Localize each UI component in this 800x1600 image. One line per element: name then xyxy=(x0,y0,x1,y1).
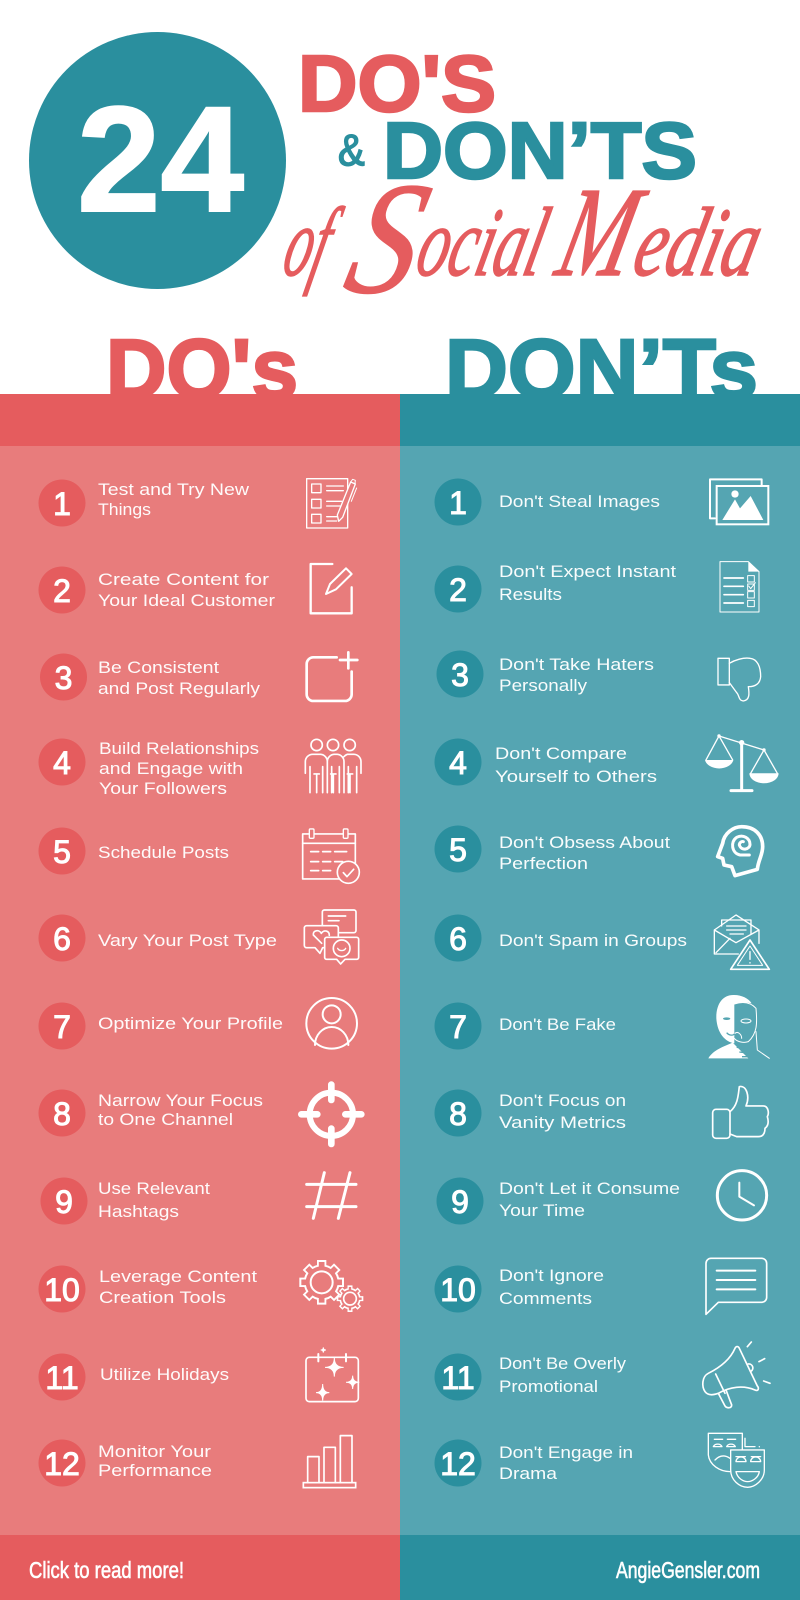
item 5: schedule posts: Schedule Posts xyxy=(98,843,229,862)
item 8: vanity metrics: Vanity Metrics xyxy=(499,1113,626,1132)
item 2: create content xyxy=(53,570,275,610)
icon: head spiral xyxy=(718,827,763,876)
item 9: consume time xyxy=(451,1179,680,1220)
item 10: comments: Don't Ignore xyxy=(499,1266,604,1285)
item 9: hashtags: 9 xyxy=(55,1184,73,1220)
item 1: test and try xyxy=(53,480,250,522)
badge: 24 circle: 24 xyxy=(77,75,244,243)
item 4: compare: Don't Compare xyxy=(495,744,627,763)
item 3: be consistent: 3 xyxy=(55,660,72,696)
icon: speech bubble xyxy=(706,1258,767,1314)
item 6: spam: Don't Spam in Groups xyxy=(499,931,687,950)
item 10: content tools: 10 xyxy=(44,1272,80,1308)
item 12: drama: Don't Engage in xyxy=(499,1443,633,1462)
footer: red link bar: Click to read more! xyxy=(29,1557,184,1583)
band: teal header xyxy=(400,394,800,446)
item 3: be consistent xyxy=(55,658,261,698)
item 1: test and try: Things xyxy=(98,500,151,519)
item 4: build relationships: Your Followers xyxy=(99,779,227,798)
icon: target crosshair xyxy=(301,1085,361,1144)
item 1: test and try: 1 xyxy=(53,486,71,522)
item 2: instant results: Results xyxy=(499,585,562,604)
item 5: perfection: Don't Obsess About xyxy=(499,833,670,852)
item 6: spam: 6 xyxy=(449,921,467,957)
item 9: consume time: Your Time xyxy=(499,1201,585,1220)
item 5: schedule posts: 5 xyxy=(53,834,71,870)
icon: calendar check xyxy=(303,829,359,883)
icon: three people xyxy=(305,739,361,793)
item 4: compare xyxy=(449,744,657,786)
title: of Social Media script: ocial xyxy=(408,187,575,297)
item 3: be consistent: Be Consistent xyxy=(98,658,219,677)
icon: document checklist xyxy=(720,562,759,612)
item 8: narrow focus: Narrow Your Focus xyxy=(98,1091,263,1110)
icon: drama masks xyxy=(708,1433,764,1487)
panel: don'ts list xyxy=(400,446,800,1535)
item 12: drama: Drama xyxy=(499,1464,558,1483)
item 12: monitor performance: 12 xyxy=(44,1446,80,1482)
item 12: drama xyxy=(440,1443,633,1483)
title: ampersand: & xyxy=(337,124,366,176)
item 6: spam xyxy=(449,921,687,957)
item 10: content tools: Creation Tools xyxy=(99,1288,226,1307)
item 11: promotional: Promotional xyxy=(499,1377,598,1396)
item 1: steal images: Don't Steal Images xyxy=(499,492,660,511)
icon: holiday calendar xyxy=(306,1347,359,1402)
item 9: hashtags: Use Relevant xyxy=(98,1179,210,1198)
icon: chat bubbles xyxy=(304,910,359,964)
icon: mask face xyxy=(708,995,769,1058)
badge: 24 circle xyxy=(29,32,286,289)
item 8: narrow focus: to One Channel xyxy=(98,1110,233,1129)
panel: do's list xyxy=(0,446,400,1535)
item 5: perfection xyxy=(449,832,670,873)
icon: clock xyxy=(717,1171,767,1220)
item 3: be consistent: and Post Regularly xyxy=(98,679,261,698)
item 4: compare: Yourself to Others xyxy=(495,767,657,786)
footer: red link bar xyxy=(0,1535,400,1600)
item 7: optimize profile: 7 xyxy=(53,1009,71,1045)
title: of Social Media script: S xyxy=(332,150,444,327)
icon: scales xyxy=(705,734,779,791)
item 10: content tools: Leverage Content xyxy=(99,1267,257,1286)
item 7: optimize profile xyxy=(53,1009,283,1045)
item 4: compare: 4 xyxy=(449,745,467,781)
item 10: content tools xyxy=(44,1267,257,1308)
item 12: monitor performance: Performance xyxy=(98,1461,212,1480)
icon: thumbs up xyxy=(713,1086,768,1138)
footer: teal site bar xyxy=(400,1535,800,1600)
item 12: monitor performance: Monitor Your xyxy=(98,1442,211,1461)
item 8: vanity metrics: 8 xyxy=(449,1096,467,1132)
footer: teal site bar: AngieGensler.com xyxy=(616,1557,760,1583)
item 3: haters: Don't Take Haters xyxy=(499,655,654,674)
icon: square plus xyxy=(307,652,357,701)
icon: bar chart xyxy=(303,1436,356,1488)
item 9: hashtags: Hashtags xyxy=(98,1202,179,1221)
item 11: holidays: 11 xyxy=(45,1360,79,1396)
title: DON'TS: DON’TS xyxy=(383,106,697,195)
item 4: build relationships: 4 xyxy=(53,745,71,781)
icon: gears xyxy=(299,1260,363,1312)
item 1: steal images xyxy=(449,485,660,521)
icon: checklist and pen xyxy=(307,479,357,528)
item 7: fake xyxy=(449,1009,616,1045)
title: of Social Media script: of xyxy=(275,187,358,297)
band: red header xyxy=(0,394,400,446)
item 2: create content: Create Content for xyxy=(98,570,269,589)
item 3: haters: 3 xyxy=(451,657,469,693)
item 2: instant results: Don't Expect Instant xyxy=(499,562,676,581)
icon: megaphone xyxy=(703,1342,770,1408)
icon: envelope warning xyxy=(714,915,769,969)
heading: DON'Ts column: DON’Ts xyxy=(445,322,758,416)
item 2: instant results: 2 xyxy=(449,572,467,608)
icon: thumbs down xyxy=(718,658,761,701)
item 2: create content: Your Ideal Customer xyxy=(98,591,275,610)
item 5: perfection: Perfection xyxy=(499,854,588,873)
item 11: holidays xyxy=(45,1360,229,1396)
item 6: vary post type: Vary Your Post Type xyxy=(98,931,277,950)
item 10: comments xyxy=(440,1266,604,1308)
item 3: haters xyxy=(451,655,654,695)
item 2: instant results xyxy=(449,562,676,608)
item 8: vanity metrics xyxy=(449,1091,626,1132)
item 7: fake: 7 xyxy=(449,1009,467,1045)
item 8: vanity metrics: Don't Focus on xyxy=(499,1091,626,1110)
item 11: promotional: Don't Be Overly xyxy=(499,1354,627,1373)
item 11: holidays: Utilize Holidays xyxy=(100,1365,229,1384)
item 9: hashtags xyxy=(55,1179,210,1221)
item 7: fake: Don't Be Fake xyxy=(499,1015,616,1034)
item 6: vary post type: 6 xyxy=(53,921,71,957)
item 8: narrow focus xyxy=(53,1091,263,1132)
item 5: perfection: 5 xyxy=(449,832,467,868)
item 1: steal images: 1 xyxy=(449,485,467,521)
item 3: haters: Personally xyxy=(499,676,588,695)
heading: DO's column: DO's xyxy=(106,322,298,416)
item 10: comments: 10 xyxy=(440,1272,476,1308)
title: of Social Media script: M xyxy=(544,162,658,304)
item 12: monitor performance xyxy=(44,1442,212,1482)
item 2: create content: 2 xyxy=(53,573,71,609)
item 7: optimize profile: Optimize Your Profile xyxy=(98,1014,283,1033)
item 6: vary post type xyxy=(53,921,277,957)
item 4: build relationships xyxy=(53,739,259,798)
icon: images xyxy=(710,479,768,524)
item 8: narrow focus: 8 xyxy=(53,1096,71,1132)
item 9: consume time: Don't Let it Consume xyxy=(499,1179,680,1198)
item 10: comments: Comments xyxy=(499,1289,592,1308)
item 5: schedule posts xyxy=(53,834,229,870)
title: DO'S: DO'S xyxy=(298,39,496,128)
icon: hash xyxy=(307,1173,356,1218)
item 4: build relationships: and Engage with xyxy=(99,759,243,778)
icon: profile xyxy=(306,998,357,1049)
item 12: drama: 12 xyxy=(440,1446,476,1482)
item 4: build relationships: Build Relationships xyxy=(99,739,259,758)
item 1: test and try: Test and Try New xyxy=(98,480,250,499)
icon: note and pencil xyxy=(311,564,352,613)
item 11: promotional xyxy=(441,1354,627,1396)
item 11: promotional: 11 xyxy=(441,1360,475,1396)
item 9: consume time: 9 xyxy=(451,1184,469,1220)
